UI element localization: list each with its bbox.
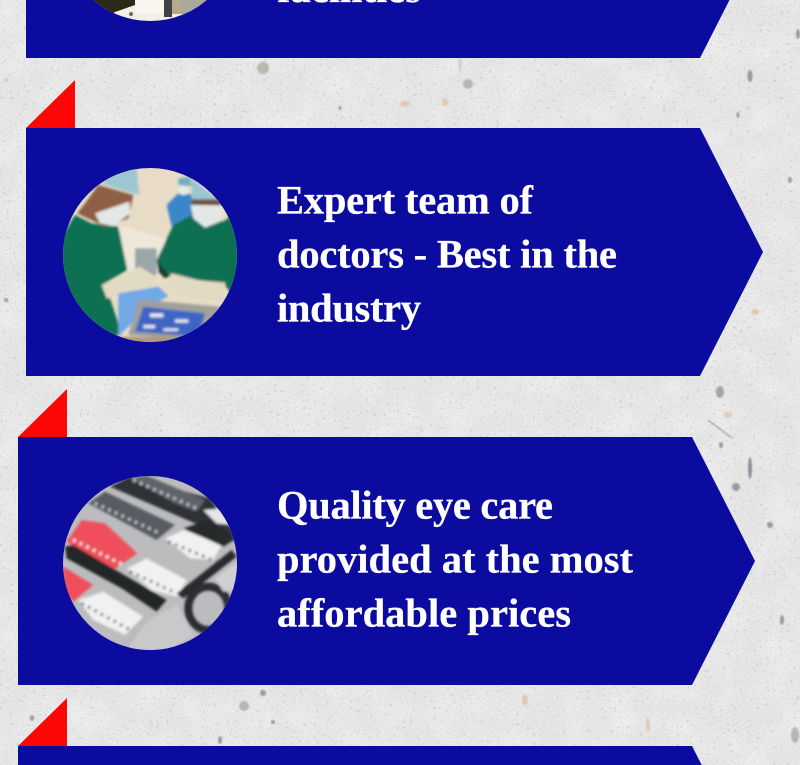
ribbon fold 4	[18, 698, 67, 746]
photo 2: surgeons	[60, 167, 242, 350]
text: expert team: Expert team of	[277, 178, 534, 222]
ribbon fold 3	[18, 389, 67, 437]
panel 4: cropped at bottom	[18, 746, 702, 765]
text: expert team: industry	[277, 286, 421, 330]
panel 1: facilities (cropped at top)	[26, 0, 730, 58]
text: quality eye care: Quality eye care	[277, 482, 553, 528]
text: quality eye care: affordable prices	[277, 590, 571, 636]
text: expert team: doctors - Best in the	[277, 232, 617, 276]
text: expert team	[277, 178, 617, 330]
photo 3: trial lens set	[60, 475, 240, 655]
panel 3: affordable eye care	[18, 437, 755, 685]
ribbon fold 2	[26, 80, 75, 128]
text: quality eye care	[277, 482, 634, 636]
photo 1: equipment	[93, 0, 207, 21]
text: quality eye care: provided at the most	[277, 536, 634, 582]
panel 2: expert team of doctors	[26, 128, 763, 376]
